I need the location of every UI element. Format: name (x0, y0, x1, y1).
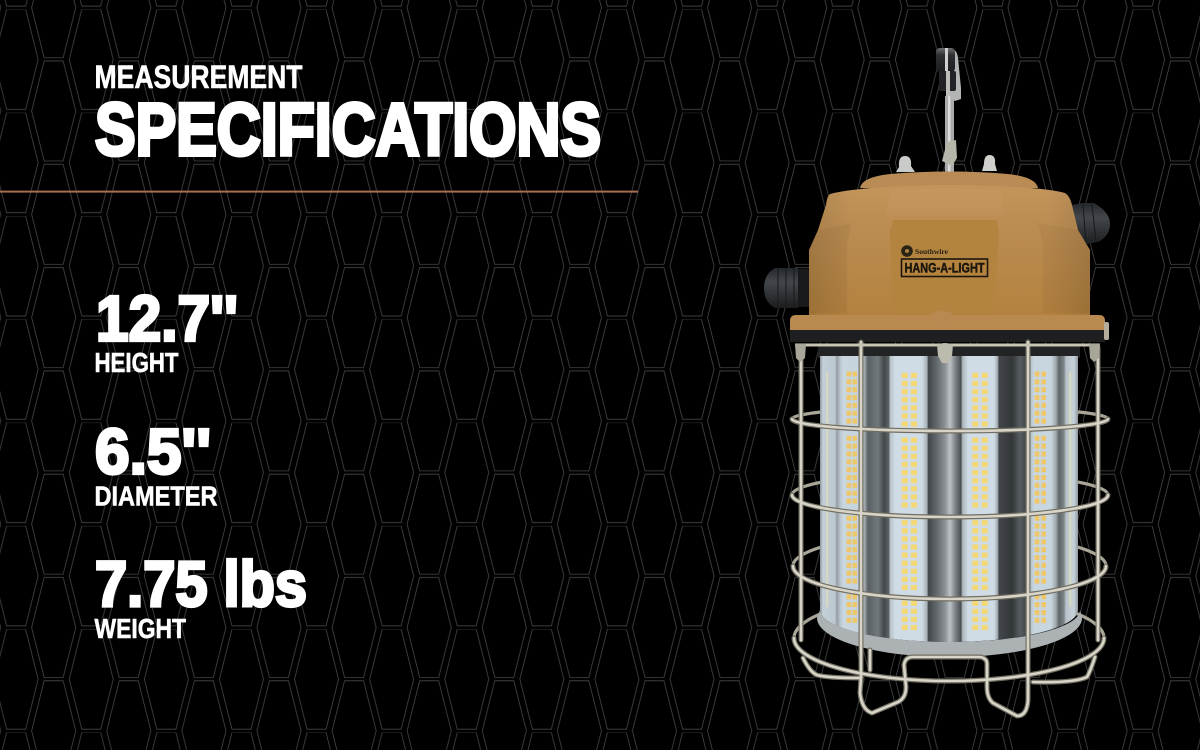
flange and gasket (790, 311, 1109, 358)
brand logo (901, 245, 988, 276)
title (94, 59, 601, 171)
value: 12.7 inches: 12.7'' (96, 282, 238, 354)
spec: diameter (94, 416, 218, 512)
cage top ring and clips (795, 343, 1100, 363)
base plate (817, 610, 1082, 657)
brand logo: HANG-A-LIGHT (904, 260, 985, 276)
cable gland: left (764, 268, 810, 308)
led strips, panel 2 (902, 372, 917, 632)
label: weight: WEIGHT (94, 613, 186, 644)
facets (809, 223, 852, 313)
value: 6.5 inches: 6.5'' (95, 416, 211, 488)
title line: specifications: SPECIFICATIONS (95, 88, 601, 171)
label: diameter: DIAMETER (94, 480, 218, 512)
title line: measurement: MEASUREMENT (94, 59, 303, 95)
housing dome (809, 172, 1090, 315)
mounting nuts (896, 155, 997, 172)
cage shadow strokes (792, 342, 1108, 716)
divider rule (0, 191, 638, 193)
led strips, panel 3 (972, 372, 988, 632)
hanging hook (936, 48, 961, 172)
led cylinder (820, 356, 1078, 646)
southwire wordmark: Southwire (915, 247, 949, 256)
led strips, panel 4 (1035, 371, 1046, 625)
spec: weight (94, 548, 307, 644)
hang-a-light badge (902, 259, 988, 276)
body (809, 185, 1090, 315)
top lip (860, 172, 1038, 188)
cage back arcs (792, 407, 1108, 638)
cage (792, 342, 1108, 716)
highlight (886, 188, 1004, 215)
value: 7.75 lbs: 7.75 lbs (95, 548, 307, 620)
spec: height (94, 282, 238, 378)
label: height: HEIGHT (94, 347, 178, 378)
led strips, panel 1 (846, 371, 857, 625)
southwire mark (901, 245, 913, 257)
edge leds (826, 372, 828, 607)
cage highlight strokes (792, 342, 1108, 716)
product photo: hang-a-light lamp (764, 48, 1110, 716)
cable gland: right (1072, 203, 1110, 245)
